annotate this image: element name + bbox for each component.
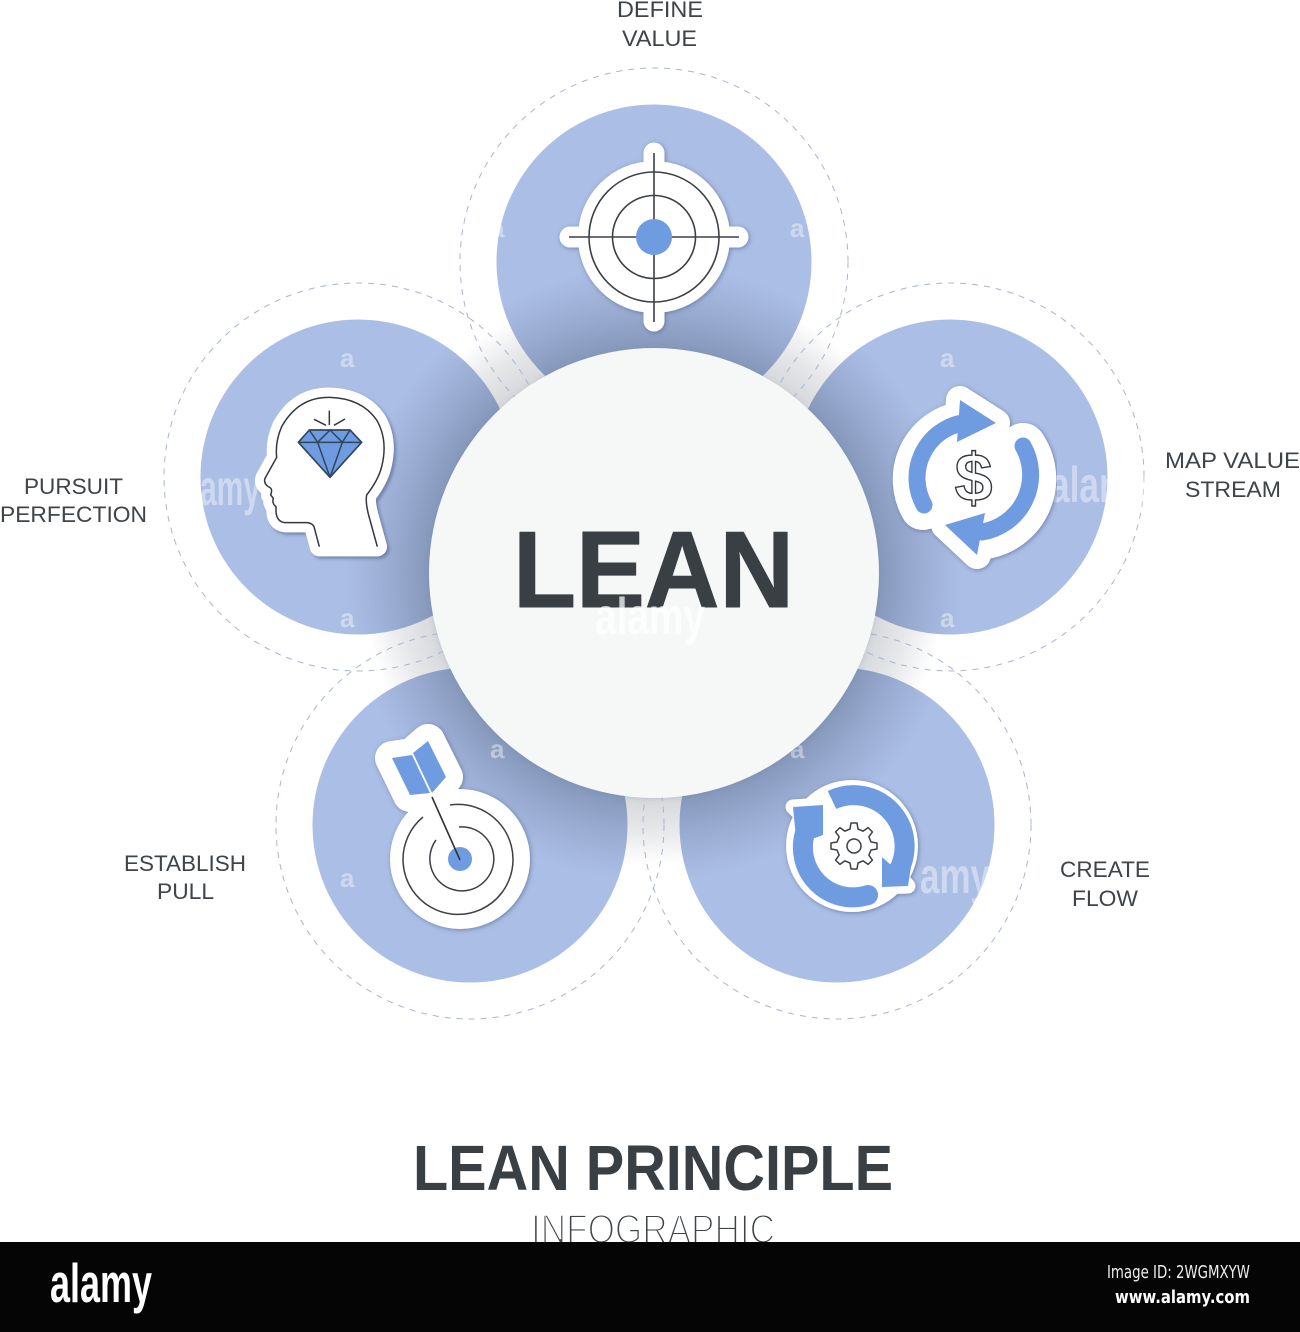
watermark marks: a <box>340 863 355 893</box>
icon: create flow cycle with gear <box>786 780 918 912</box>
watermark marks: a <box>940 343 955 373</box>
watermark marks <box>200 213 1150 904</box>
icon: crosshair target <box>569 153 739 322</box>
watermark marks: a <box>640 343 655 373</box>
label: map value stream: STREAM <box>1185 477 1281 502</box>
watermark marks: a <box>790 213 805 243</box>
label: create flow: FLOW <box>1072 886 1138 911</box>
footer bar <box>0 1242 1300 1332</box>
main title: LEAN PRINCIPLE <box>413 1132 893 1204</box>
label: establish pull <box>124 851 246 904</box>
label: create flow: CREATE <box>1060 857 1150 882</box>
label: pursuit perfection <box>0 474 147 527</box>
dollar sign: $ <box>955 440 992 516</box>
label: map value stream: MAP VALUE <box>1165 448 1300 473</box>
center watermark: alamy <box>595 588 705 646</box>
label: create flow <box>1060 857 1150 911</box>
label: establish pull: ESTABLISH <box>124 851 246 876</box>
label: define value: VALUE <box>622 26 697 51</box>
watermark marks: amy <box>920 848 990 904</box>
watermark marks: a <box>940 603 955 633</box>
label: map value stream <box>1165 448 1300 502</box>
label: define value <box>617 0 703 51</box>
label: pursuit perfection: PERFECTION <box>0 502 147 527</box>
watermark marks: a <box>490 213 505 243</box>
watermark marks: a <box>340 343 355 373</box>
dashed outer rings <box>164 68 1144 1019</box>
watermark marks: amy <box>200 460 260 516</box>
watermark marks: a <box>340 603 355 633</box>
center circle soft shadow halo <box>362 281 946 865</box>
watermark marks: a <box>490 734 505 764</box>
subtitle: INFOGRAPHIC <box>531 1206 775 1252</box>
center circle <box>429 348 879 798</box>
icon: dart on bullseye <box>390 741 530 929</box>
site url: www.alamy.com <box>1115 1287 1250 1308</box>
image id: Image ID: 2WGMXYW <box>1107 1262 1250 1283</box>
petal circles <box>200 104 1108 982</box>
watermark marks: alamy <box>1050 457 1150 513</box>
footer logo: alamy <box>50 1252 152 1314</box>
label: establish pull: PULL <box>157 879 214 904</box>
watermark marks: a <box>790 734 805 764</box>
icon: head with diamond <box>265 397 384 547</box>
label: pursuit perfection: PURSUIT <box>24 474 123 499</box>
icon: value stream cycle with dollar <box>915 400 1033 555</box>
center title: LEAN: LEAN <box>513 509 794 631</box>
gear <box>831 823 877 869</box>
